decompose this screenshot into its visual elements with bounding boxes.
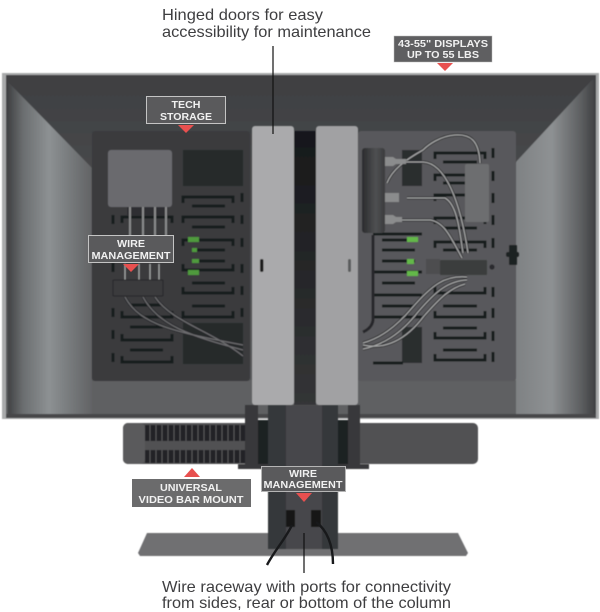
side latch [506,245,519,265]
label: wire management column: WIRE [289,468,317,480]
caption: wire raceway [162,579,451,612]
caption: wire raceway: Wire raceway with ports for connectivity [162,579,451,596]
label: wire management column [262,466,346,502]
right tech storage plate [358,131,519,381]
video bar [123,423,478,464]
wiring: left [125,264,243,356]
display back panel [2,73,599,419]
arrow [437,63,453,71]
support column and brackets [238,405,369,549]
caption: hinged doors: Hinged doors for easy [162,7,323,24]
label: tech storage [146,96,226,133]
caption: hinged doors [162,7,371,41]
right wedge [515,80,596,416]
hinged doors [252,126,358,405]
caption: wire raceway: from sides, rear or bottom of the column [162,595,451,612]
wiring: right [363,135,480,349]
status lights [407,237,418,276]
label: displays: 43-55" DISPLAYS [398,38,488,50]
status lights [188,237,199,275]
slot pattern: right plate [373,148,493,363]
label: universal video bar mount [132,468,251,507]
left wedge [8,82,92,416]
left door [252,126,294,405]
power brick [465,164,489,222]
label: wire management left [88,236,174,272]
left tech storage plate [92,131,250,381]
arrow [123,264,139,272]
slot pattern: left plate [113,150,243,364]
power strip [362,148,406,233]
cable clip: left [113,280,163,296]
tech storage box [108,150,172,237]
cable clip: right [426,259,495,275]
label: wire management left: WIRE [117,238,145,250]
right door [316,126,358,405]
arrow [296,493,312,502]
caption: hinged doors: accessibility for maintenance [162,24,371,41]
wire ports [286,510,295,527]
leader line: raceway [303,533,305,573]
arrow [178,125,194,133]
arrow [184,468,200,477]
label: displays [394,36,492,71]
label: tech storage: TECH [172,99,200,111]
base plate [138,533,468,556]
label: wire management left: MANAGEMENT [92,250,171,262]
label: universal video bar mount: UNIVERSAL [160,482,223,494]
label: displays: UP TO 55 LBS [407,49,479,61]
label: wire management column: MANAGEMENT [264,479,343,491]
label: universal video bar mount: VIDEO BAR MOUNT [138,494,244,506]
cables exiting column [267,522,333,565]
speaker grille [145,425,248,463]
leader line: doors [272,46,274,134]
label: tech storage: STORAGE [160,111,212,123]
